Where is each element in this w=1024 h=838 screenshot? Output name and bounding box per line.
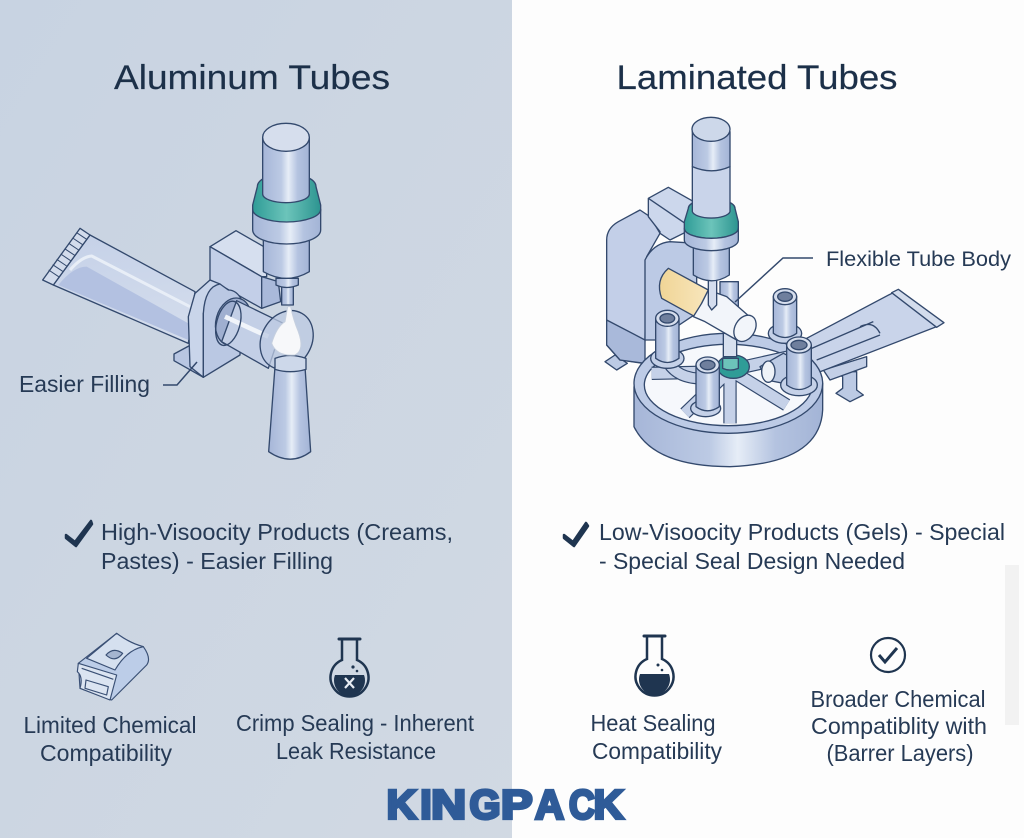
text: broader chemical compatibility: Broader Chemical <box>810 686 986 712</box>
text: high viscosity products: High-Visoocity Products (Creams, <box>101 519 453 545</box>
text: low viscosity products: Low-Visoocity Products (Gels) - Special <box>599 519 1005 545</box>
logo: KINGPACK <box>387 782 624 828</box>
text: limited chemical compatibility: Compatibility <box>40 740 172 766</box>
text: broader chemical compatibility: (Barrer Layers) <box>826 740 974 766</box>
text: heat sealing <box>590 710 722 764</box>
text: crimp sealing <box>236 710 475 764</box>
leader line: easier filling <box>163 362 197 385</box>
logo: KINGPACK: K <box>387 782 417 828</box>
logo: KINGPACK: G <box>470 782 500 828</box>
rotary base <box>634 333 823 467</box>
tapered lower nozzle <box>269 367 311 459</box>
text: broader chemical compatibility: Compatiblity with <box>811 713 987 739</box>
text: low viscosity products: - Special Seal Design Needed <box>599 548 905 574</box>
logo: KINGPACK: K <box>594 782 624 828</box>
text: crimp sealing: Crimp Sealing - Inherent <box>236 710 475 736</box>
text: crimp sealing: Leak Resistance <box>276 738 436 764</box>
logo: KINGPACK: A <box>535 782 564 828</box>
label: easier filling: Easier Filling <box>19 371 150 397</box>
logo: KINGPACK: N <box>431 782 466 828</box>
icon: flask <box>636 636 674 695</box>
illustration: aluminum tube filling machine <box>43 123 324 459</box>
mounting block <box>210 231 281 308</box>
leader line: flexible tube body <box>735 258 813 302</box>
saddle bracket <box>174 280 242 377</box>
tube body <box>43 228 195 343</box>
text: heat sealing: Heat Sealing <box>590 710 716 736</box>
title: laminated tubes: Laminated Tubes <box>616 59 898 97</box>
logo: KINGPACK: P <box>501 782 533 828</box>
posts on turntable <box>651 289 817 417</box>
yellow roller and flexible tube <box>659 268 761 357</box>
check icon: high viscosity <box>66 521 92 546</box>
icon: crimped aluminum tube <box>77 633 149 700</box>
icon: circle check <box>871 638 905 672</box>
text: high viscosity products: Pastes) - Easier Filling <box>101 548 333 574</box>
upper filling cylinder <box>684 117 738 310</box>
text: broader chemical compatibility <box>810 686 987 766</box>
tube on right <box>807 289 944 402</box>
horizontal barrel <box>210 294 324 379</box>
machine housing <box>605 187 697 370</box>
post behind and vertical shaft <box>720 282 738 313</box>
logo: KINGPACK: I <box>420 782 432 828</box>
upper filling cylinder <box>253 123 321 305</box>
cream dispensing <box>272 307 301 355</box>
text: limited chemical compatibility <box>24 712 196 766</box>
icon: flask with x <box>330 639 368 696</box>
text: high viscosity products <box>101 519 453 574</box>
illustration: laminated tube rotary machine <box>605 117 944 467</box>
text: low viscosity products <box>599 519 1005 574</box>
panel: aluminum tubes background <box>0 0 512 838</box>
title: aluminum tubes: Aluminum Tubes <box>114 59 390 97</box>
label: flexible tube body: Flexible Tube Body <box>826 248 1012 271</box>
text: limited chemical compatibility: Limited Chemical <box>24 712 196 738</box>
panel: laminated tubes background <box>512 0 1024 838</box>
logo: KINGPACK: C <box>569 782 595 828</box>
check icon: low viscosity <box>564 523 588 546</box>
text: heat sealing: Compatibility <box>592 738 722 764</box>
